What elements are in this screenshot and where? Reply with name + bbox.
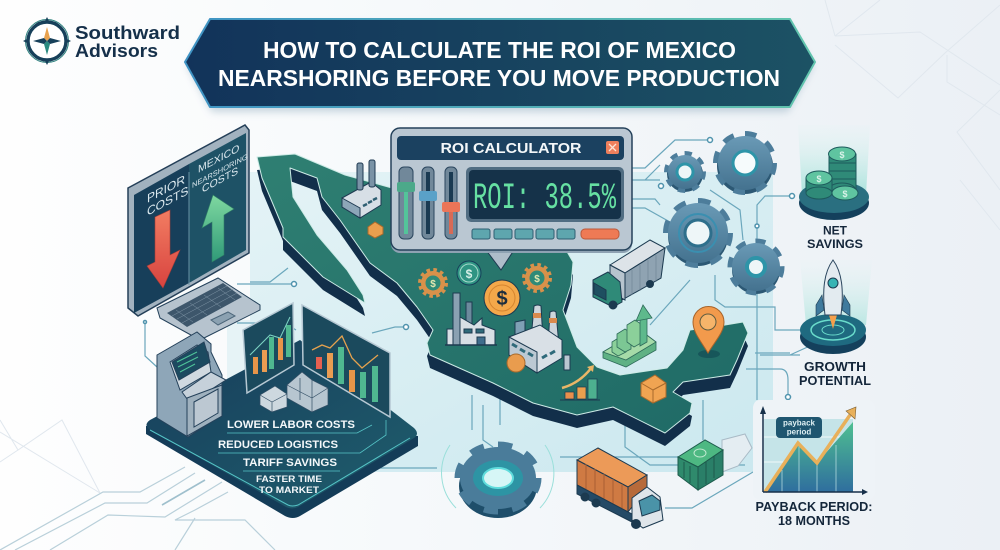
chart: payback line: period	[787, 428, 811, 436]
LCD display	[466, 167, 624, 222]
icon: left coin gear: $	[430, 279, 436, 290]
icon: green coin: $	[466, 267, 473, 281]
icon: factory two	[507, 305, 570, 373]
control buttons	[472, 229, 619, 239]
close button	[606, 141, 619, 154]
icon: orange container truck	[577, 448, 663, 528]
icon: big gold coin: $	[496, 288, 508, 310]
monitor label: prior costs: PRIOR	[147, 172, 185, 206]
icon: green cash container	[678, 434, 752, 490]
label: net savings: NET	[823, 224, 848, 238]
icon: rocket platform	[800, 260, 866, 354]
benefit text: LOWER LABOR COSTS	[227, 419, 355, 431]
label: payback period: 18 MONTHS	[778, 513, 850, 528]
icon: kiosk	[157, 332, 226, 437]
connector nodes	[144, 138, 794, 400]
gear: middle	[667, 202, 729, 266]
logo: Southward Advisors	[23, 17, 180, 65]
benefit text	[218, 419, 355, 496]
panel fade	[227, 320, 250, 400]
bottom-left circuit traces	[0, 467, 275, 550]
glow	[800, 260, 872, 325]
gear: top	[717, 135, 773, 194]
label: payback period: PAYBACK PERIOD:	[756, 499, 872, 514]
benefit text: TO MARKET	[259, 485, 319, 496]
LCD display: ROI: 38.5%	[473, 178, 617, 220]
map of Mexico	[257, 154, 748, 446]
logo: Southward Advisors: Advisors	[75, 40, 158, 61]
benefit text: REDUCED LOGISTICS	[218, 439, 338, 451]
chart panel	[753, 400, 875, 500]
payback period	[753, 400, 875, 528]
title banner	[185, 19, 815, 112]
benefits platform	[146, 303, 418, 518]
title text: NEARSHORING BEFORE YOU MOVE PRODUCTION	[218, 65, 780, 91]
icon: red down arrow	[147, 210, 180, 288]
icon: mini growth chart	[560, 365, 600, 400]
icon: laptop	[157, 278, 260, 340]
label: growth potential: GROWTH	[804, 360, 866, 374]
icon: small factory	[342, 160, 381, 218]
icon: large lower gear	[442, 445, 554, 518]
chart: payback line: payback	[783, 418, 816, 428]
icon: small crates	[260, 372, 328, 412]
gears cluster	[667, 135, 781, 294]
chart: right screen	[302, 305, 390, 417]
pale circuit panel	[250, 172, 773, 472]
benefit underlines	[218, 420, 386, 471]
icon: green truck	[593, 240, 665, 309]
gear: small	[667, 154, 703, 192]
icon: green up arrow	[202, 195, 234, 262]
chart: left screen	[243, 303, 294, 393]
growth potential	[799, 260, 872, 388]
calculator pointer	[486, 250, 514, 270]
net savings	[798, 125, 870, 251]
icon: factory one	[445, 293, 497, 345]
benefit text: TARIFF SAVINGS	[243, 457, 337, 469]
map icons: coins and gears	[420, 261, 550, 316]
icon: coin platform: $	[842, 189, 848, 199]
benefit text: FASTER TIME	[256, 474, 322, 485]
icon: green crates with arrow	[603, 305, 656, 367]
calculator title: ROI CALCULATOR	[440, 141, 582, 157]
label: growth potential: POTENTIAL	[799, 374, 871, 388]
monitor label: nearshoring costs: COSTS	[202, 165, 238, 196]
icon: coin platform: $	[816, 174, 822, 184]
glow	[798, 125, 870, 195]
icon: small parcel	[368, 222, 383, 238]
label: net savings: SAVINGS	[807, 237, 863, 251]
title text: HOW TO CALCULATE THE ROI OF MEXICO	[263, 37, 736, 63]
connector lines	[145, 140, 812, 508]
icon: location pin	[693, 306, 724, 358]
calculator panel	[391, 128, 632, 270]
icon: right coin gear: $	[534, 274, 540, 285]
icon: parcel on map	[641, 375, 666, 403]
gear: lower	[731, 242, 781, 294]
monitor label: nearshoring costs: MEXICO	[198, 142, 240, 176]
monitor	[128, 125, 249, 316]
logo text: Southward	[75, 22, 180, 43]
icon: compass	[23, 17, 71, 65]
monitor label: nearshoring costs: NEARSHORING	[192, 152, 248, 190]
sliders	[397, 167, 460, 239]
icon: coin platform	[799, 147, 869, 220]
chart: payback line	[760, 406, 868, 495]
icon: coin platform: $	[839, 150, 845, 160]
monitor label: prior costs: COSTS	[147, 183, 188, 219]
